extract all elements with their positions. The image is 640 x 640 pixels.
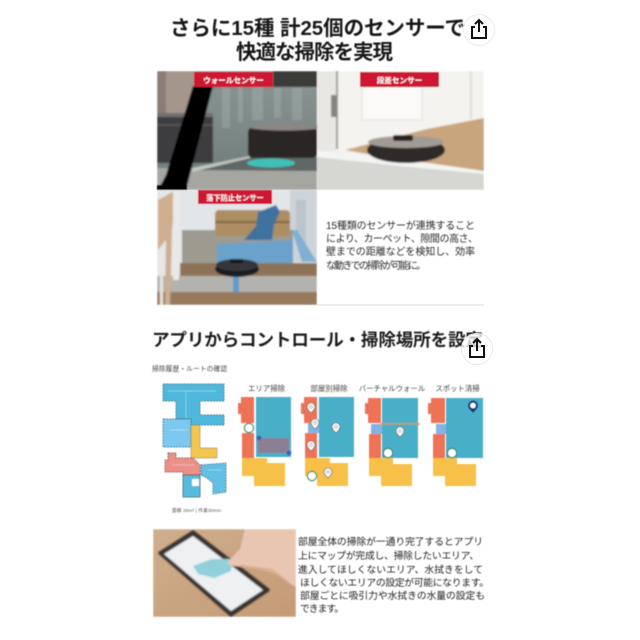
map panel: virtual wall [359,384,426,486]
label: fall prevention sensor [198,190,272,204]
sensor description text: 15種類のセンサーが連携すること [326,219,475,232]
floor plan: cleaning route map [163,384,226,497]
title: さらに15種 計25個のセンサーで [170,17,465,40]
sensor description text: により、カーペット、隙間の高さ、 [326,232,478,245]
map panel: spot cleaning: スポット清掃 [435,384,480,393]
app description text: できます。 [300,603,344,615]
app description text: ほしくないエリアの設定が可能になります。 [300,576,489,589]
sensor description text [326,219,478,272]
map panel: virtual wall: バーチャルウォール [359,384,426,393]
app description text: 部屋全体の掃除が一通り完了するとアプリ [298,535,483,548]
app description text: 進入してほしくないエリア、水拭きをして [298,563,483,576]
label: wall sensor: ウォールセンサー [203,76,264,85]
map panel: spot cleaning [428,384,483,486]
photo: wall sensor [157,71,321,190]
icon: share button top [464,14,494,46]
photo: phone with app [153,529,296,617]
label: wall sensor [194,72,273,87]
route history label: 掃除履歴・ルートの確認 [152,364,227,373]
label: step sensor: 段差センサー [377,75,422,85]
app description text [298,535,489,615]
photo: fall prevention sensor [157,185,317,305]
app description text: 部屋ごとに吸引力や水拭きの水量の設定も [300,589,485,602]
map panel: room cleaning [301,384,354,486]
sensor and app content [152,17,489,617]
photo: step sensor [317,71,484,190]
icon: share button middle [462,334,492,364]
map panel: area cleaning: エリア掃除 [248,384,286,393]
title: 快適な掃除を実現 [236,41,394,64]
sensor description text: 壁までの距離などを検知し、効率 [326,245,475,258]
title [170,17,465,64]
label: step sensor [360,72,439,87]
sensor description text: な動きでの掃除が可能に。 [326,259,426,272]
map footnote: 面積 28m² | 作業30min [172,507,221,514]
label: fall prevention sensor: 落下防止センサー [206,194,264,202]
app description text: 上にマップが完成し、掃除したいエリア、 [298,549,479,562]
map panel: room cleaning: 部屋別掃除 [311,384,348,393]
map panel: area cleaning [238,384,291,486]
app section heading: アプリからコントロール・掃除場所を設定 [152,330,483,350]
